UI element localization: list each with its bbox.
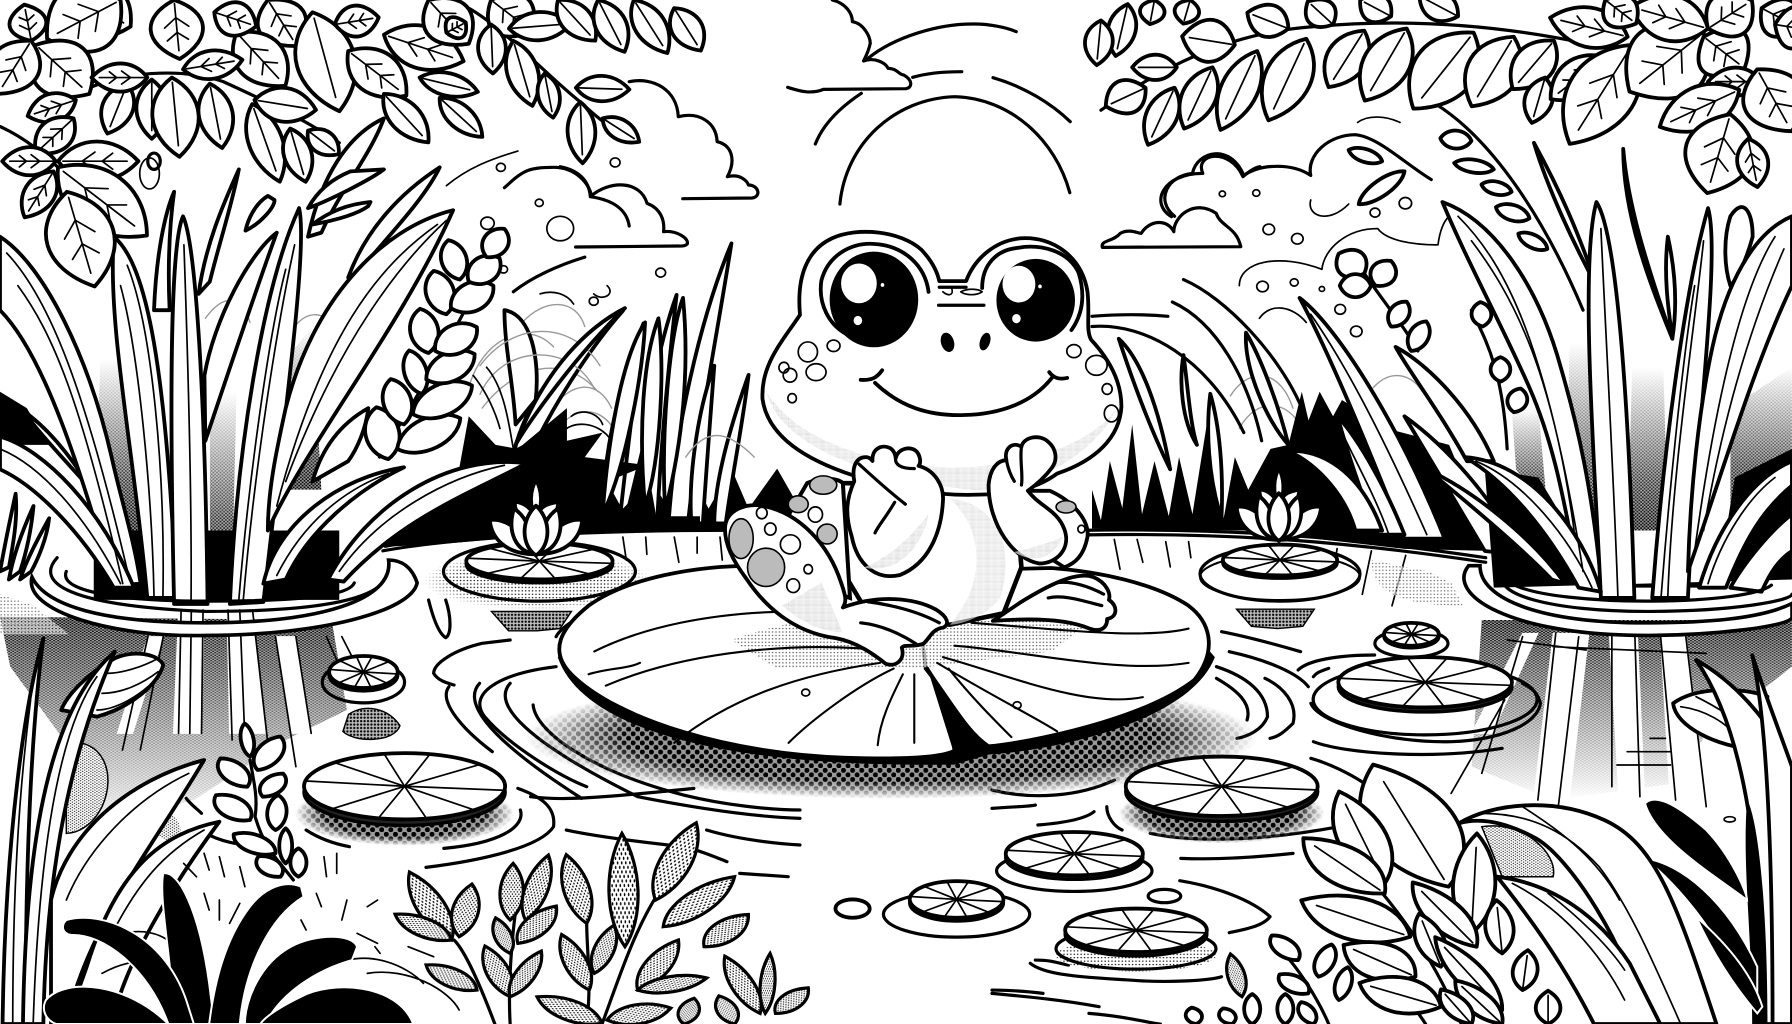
broad leaves bbox=[1349, 867, 1461, 1024]
chin shading bbox=[766, 391, 1118, 491]
cloud left lower bbox=[560, 167, 687, 247]
water ripples right bbox=[992, 632, 1540, 1024]
small lily pads bbox=[304, 542, 1537, 969]
shore lines bbox=[383, 526, 1486, 562]
right foot bbox=[993, 576, 1115, 630]
cloud top centre bbox=[788, 0, 911, 92]
big blades bbox=[22, 410, 92, 490]
sun bbox=[840, 97, 1070, 204]
right reflection bbox=[1451, 620, 1792, 807]
ring shade bbox=[0, 560, 1463, 634]
back left leg spots bbox=[788, 476, 868, 598]
background blades bbox=[154, 192, 174, 310]
right plant bbox=[1427, 143, 1792, 598]
left reflection bbox=[0, 610, 357, 843]
head bbox=[762, 232, 1121, 495]
lotus flowers bbox=[343, 469, 1321, 739]
smile bbox=[861, 370, 1067, 415]
sun rays bbox=[815, 24, 1070, 144]
ring left bbox=[51, 558, 389, 611]
eye right bbox=[996, 259, 1075, 342]
cloud left bbox=[629, 81, 758, 199]
black leaves bbox=[1645, 800, 1747, 900]
bush dots bbox=[1482, 826, 1554, 877]
submerged petals bbox=[343, 609, 1314, 739]
foreground right bbox=[1184, 655, 1792, 1024]
water with reflections bbox=[0, 526, 1792, 1024]
sprig bbox=[205, 723, 306, 881]
centre grass behind frog bbox=[457, 243, 823, 537]
eye rings bbox=[821, 244, 929, 336]
ring right bbox=[1503, 571, 1792, 611]
pad rings bbox=[443, 542, 635, 601]
tall blades bbox=[3, 638, 43, 1024]
frog bbox=[725, 232, 1121, 665]
far bushes right and branch bbox=[1165, 104, 1583, 449]
eye left bbox=[830, 252, 918, 347]
sky: sun and clouds bbox=[560, 0, 1260, 247]
back right leg bbox=[1029, 491, 1088, 567]
far grass right bbox=[1092, 280, 1521, 555]
branch stem bbox=[1101, 23, 1583, 110]
dark leaves bbox=[44, 873, 413, 1024]
pad bbox=[304, 753, 505, 825]
foreground left bbox=[3, 638, 817, 1024]
left thigh and foot bbox=[725, 505, 947, 665]
cloud right bbox=[1102, 156, 1260, 247]
forehead bump bbox=[939, 287, 984, 305]
body bbox=[836, 483, 1021, 625]
small low blades bbox=[0, 494, 49, 580]
big lily pad bbox=[558, 566, 1215, 765]
water ripples bbox=[186, 600, 800, 877]
shade behind blades bbox=[1568, 348, 1595, 515]
far bushes left bbox=[205, 151, 666, 441]
sprig bbox=[1364, 273, 1507, 449]
notch wedge bbox=[926, 663, 990, 754]
left arm bbox=[847, 447, 943, 576]
nostrils bbox=[938, 331, 957, 354]
small sprig bbox=[1184, 931, 1356, 1024]
right arm bbox=[989, 437, 1066, 563]
big curved leaves bbox=[1459, 805, 1716, 1024]
pad shading bbox=[731, 608, 1097, 669]
grass tufts bbox=[184, 853, 434, 957]
foliage top left bbox=[0, 0, 714, 294]
face spots bbox=[779, 340, 1119, 422]
pad veins bbox=[589, 611, 1189, 745]
pond surface bbox=[0, 530, 1792, 1024]
beaded fern bbox=[379, 233, 504, 457]
base rings of plants bbox=[0, 558, 1792, 636]
black grass band bbox=[1092, 392, 1494, 551]
lily pad shadows bbox=[295, 551, 1360, 971]
foliage top right bbox=[1083, 0, 1792, 201]
left plant bbox=[0, 118, 527, 604]
dotted plants bbox=[388, 819, 817, 1024]
tall blades bbox=[1696, 660, 1792, 1024]
black grass silhouette bbox=[457, 440, 823, 537]
left grass silhouette bbox=[357, 298, 700, 547]
branch stems bbox=[0, 8, 634, 167]
